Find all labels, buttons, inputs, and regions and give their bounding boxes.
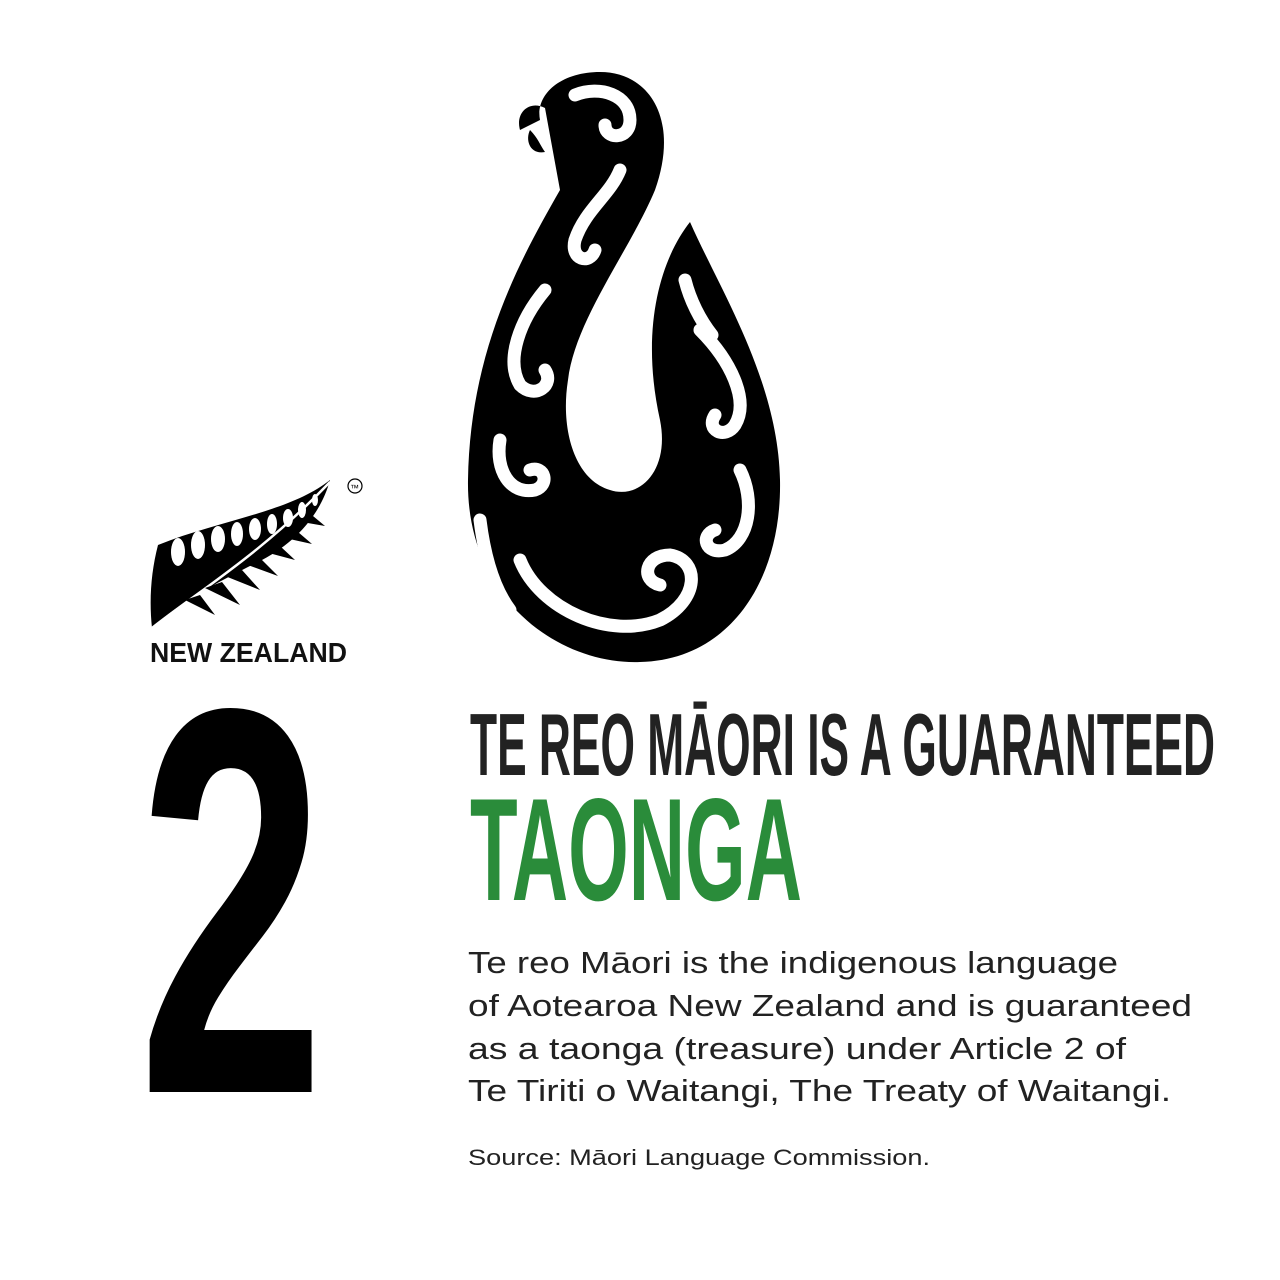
body text: as a taonga (treasure) under Article 2 of <box>468 1031 1126 1066</box>
source: Source: Māori Language Commission. <box>468 1145 930 1170</box>
heading <box>470 695 1215 931</box>
logo: silver fern New Zealand: ™ <box>350 483 359 493</box>
logo: silver fern New Zealand: NEW ZEALAND <box>150 637 347 668</box>
heading: TAONGA <box>470 768 802 931</box>
body text: Te Tiriti o Waitangi, The Treaty of Waitangi. <box>468 1073 1171 1108</box>
body text: of Aotearoa New Zealand and is guaranteed <box>468 988 1192 1023</box>
big number 2: 2 <box>138 594 325 1209</box>
body text <box>468 945 1192 1108</box>
logo: silver fern New Zealand <box>150 479 362 668</box>
icon: hei matau (Māori fish hook) <box>468 72 780 662</box>
body text: Te reo Māori is the indigenous language <box>468 945 1118 980</box>
